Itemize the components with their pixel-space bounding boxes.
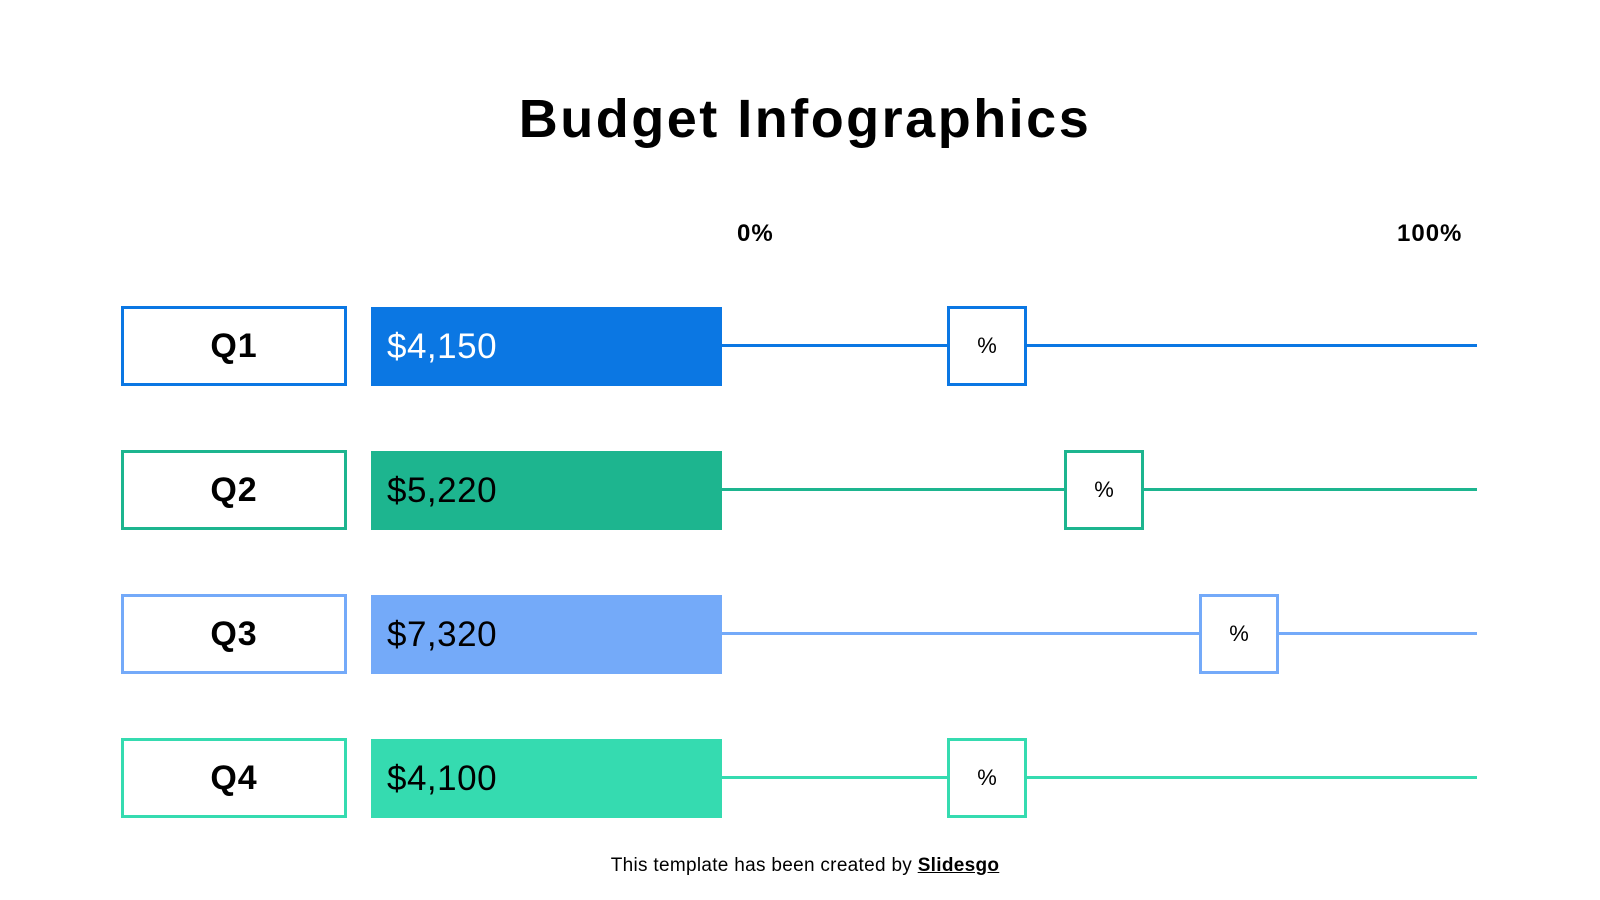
bar Q2 — [371, 451, 722, 530]
row: Q3 — [121, 594, 1477, 674]
label Q2 — [121, 450, 347, 530]
bar Q2: $5,220 — [387, 470, 497, 510]
percent marker Q4 — [947, 738, 1027, 818]
label Q3 — [121, 594, 347, 674]
label Q2: Q2 — [210, 470, 258, 508]
bar Q4 — [371, 739, 722, 818]
percent marker Q1: % — [977, 333, 997, 358]
percent marker Q2 — [1064, 450, 1144, 530]
bar Q3: $7,320 — [387, 614, 497, 654]
bar Q3 — [371, 595, 722, 674]
bar Q1: $4,150 — [387, 326, 497, 366]
axis label 100%: 100% — [1397, 220, 1462, 247]
label Q3: Q3 — [210, 614, 258, 652]
title: Budget Infographics — [519, 89, 1091, 149]
label Q4: Q4 — [210, 758, 258, 796]
footer credit: This template has been created by Slidesgo — [611, 855, 999, 876]
label Q1 — [121, 306, 347, 386]
percent marker Q2: % — [1094, 477, 1114, 502]
bar Q4: $4,100 — [387, 758, 497, 798]
axis label 0%: 0% — [737, 220, 774, 247]
percent marker Q3 — [1199, 594, 1279, 674]
percent marker Q3: % — [1229, 621, 1249, 646]
percent marker Q4: % — [977, 765, 997, 790]
label Q1: Q1 — [210, 326, 258, 364]
bar Q1 — [371, 307, 722, 386]
row: Q2 — [121, 450, 1477, 530]
percent marker Q1 — [947, 306, 1027, 386]
row: Q1 — [121, 306, 1477, 386]
label Q4 — [121, 738, 347, 818]
row: Q4 — [121, 738, 1477, 818]
